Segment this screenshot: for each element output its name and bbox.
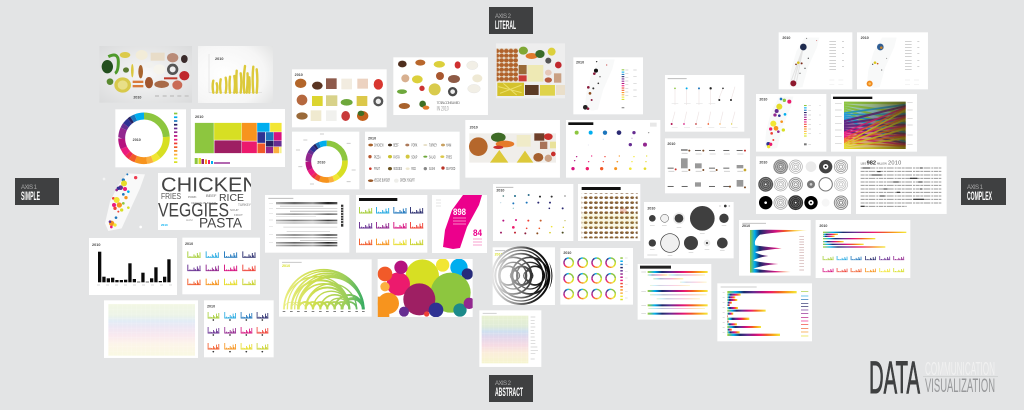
- panel: magenta map with stats: 898: [453, 207, 466, 217]
- panel: pastel grid with labels: [479, 310, 541, 367]
- panel: headline paragraph: LBS: [861, 161, 866, 165]
- panel: streaks with small multiples: [816, 220, 910, 278]
- axis label: literal: [489, 7, 533, 34]
- axis label: literal: LITERAL: [495, 18, 516, 32]
- panel: food icon list: [365, 132, 460, 189]
- axis label: abstract: AXIS 2: [495, 381, 512, 387]
- panel: word cloud: 2010: [161, 223, 168, 227]
- panel: food icon list: SOUP: [411, 154, 417, 159]
- panel: black bar chart: [89, 238, 177, 295]
- panel: small multiples with black header: [356, 195, 427, 253]
- panel: scattered food pictures: TOTAL CONSUMED: [437, 101, 460, 105]
- panel: scattered dot multiples: 2010: [496, 188, 504, 192]
- panel: food icon list: GREEK YOGURT: [400, 178, 415, 183]
- panel: magenta map with stats: [432, 195, 487, 253]
- panel: food icon list: HAM: [446, 143, 451, 148]
- panel: large food photo: 2010: [470, 125, 478, 129]
- panel: headline paragraph: 982: [867, 161, 876, 167]
- panel: fries bar chart: [198, 46, 273, 103]
- panel: linked map, blue and orange: 2010: [861, 36, 869, 40]
- panel: headline paragraph: [856, 156, 947, 214]
- panel: word cloud: BEEF: [206, 193, 217, 198]
- black bars: [98, 252, 171, 282]
- panel: food icon list: VEGGIES: [393, 166, 402, 171]
- panel: food collage treemap: [496, 43, 565, 98]
- panel: food icon list: TURKEY: [429, 143, 437, 148]
- panel: word cloud: PASTA: [199, 215, 243, 231]
- panel: word cloud: RICE: [219, 192, 244, 204]
- panel: small multiples with markers: [204, 300, 274, 357]
- panel: overlapping bubbles: [378, 258, 475, 317]
- panel: word cloud: CHICKEN: [161, 175, 258, 197]
- panel: large food photo: [465, 120, 560, 178]
- panel: small multiples grid: [182, 238, 260, 294]
- panel: small multiples grid: 2010: [185, 242, 193, 246]
- panel: food icon list: BEEF: [393, 143, 399, 148]
- panel: black overlapping rings: 2010: [495, 253, 503, 257]
- panel: dark proportional circles: 2010: [647, 206, 655, 210]
- panel: dot map on white strip: [103, 173, 145, 231]
- axis label: abstract: [489, 375, 533, 402]
- panel: word cloud: VEGGIE BURGER: [191, 201, 217, 205]
- panel: grey bars with food icons: 2010: [667, 142, 675, 146]
- panel: bubble map with legend: 2010: [759, 97, 767, 101]
- panel: word cloud: HAM: [186, 218, 193, 222]
- panel: word cloud: [158, 173, 258, 231]
- panel: map with legend: [573, 57, 643, 114]
- panel: black overlapping rings: [493, 247, 555, 305]
- panel: food icon list: PORK: [411, 143, 418, 148]
- axis label: literal: AXIS 2: [495, 14, 512, 20]
- panel: streamgraph spikes: [739, 220, 811, 276]
- axis label: simple: [15, 178, 59, 205]
- axis label: simple: AXIS 1: [21, 185, 38, 191]
- panel: dark proportional circles: [644, 202, 734, 258]
- panel: ingredient flat-lay photo: [99, 46, 192, 103]
- panel: word cloud: VEGGIES: [158, 201, 229, 222]
- panel: magenta map with stats: 84: [473, 228, 482, 238]
- panel: small donut multiples: [560, 248, 633, 305]
- panel: food photo grid: 2010: [295, 73, 303, 77]
- panel: word cloud: TURKEY: [238, 203, 252, 207]
- panel: arc diagram: [279, 259, 372, 317]
- axis label: complex: AXIS 1: [967, 185, 984, 191]
- panel: food icon list: 2010: [368, 136, 376, 140]
- panel: food photo grid: [292, 69, 387, 127]
- panel: main donut chart: [115, 109, 186, 167]
- panel: small multiples with markers: 2010: [207, 304, 215, 308]
- panel: bubble map with legend: [756, 94, 826, 152]
- panel: map with legend: 2010: [576, 61, 584, 65]
- panel: second donut with annotations: 2010: [317, 160, 325, 164]
- panel: scattered food pictures: [393, 57, 488, 115]
- panel: food icon list: RICE: [411, 166, 416, 171]
- panel: concentric ring multiples: 2010: [759, 161, 767, 165]
- panel: streaks with small multiples: 2010: [819, 224, 827, 228]
- panel: fries bar chart: 2010: [215, 57, 223, 61]
- axis label: abstract: ABSTRACT: [495, 385, 523, 399]
- panel: food icon list: CHICKEN: [374, 143, 383, 148]
- panel: arc diagram: 2010: [282, 264, 290, 268]
- panel: headline paragraph: 2010: [888, 161, 901, 167]
- axis label: simple: SIMPLE: [21, 189, 40, 203]
- panel: food icon list: FRIES: [446, 154, 452, 159]
- title wordmark: DATA: [869, 352, 920, 403]
- panel: ingredient flat-lay photo: 2010: [133, 96, 141, 100]
- axis label: complex: [961, 178, 1006, 205]
- panel: small dot charts: [665, 75, 744, 132]
- panel: pastel grid large: [104, 300, 198, 358]
- panel: grey heat bars: [265, 195, 349, 253]
- panel: pictogram grid: [578, 184, 640, 241]
- panel: linked map, navy and red: [779, 32, 852, 89]
- panel: coloured dot matrix: [566, 120, 660, 178]
- panel: scattered food pictures: IN 2010: [437, 106, 449, 113]
- panel: linked map, navy and red: 2010: [782, 36, 790, 40]
- panel: headline paragraph: MILLION: [877, 161, 887, 165]
- panel: alluvial flow diagram: [831, 94, 917, 152]
- illegible body copy rendered as lines: [861, 168, 942, 206]
- panel: food icon list: VEGGIE BURGER: [374, 178, 390, 183]
- panel: scattered dot multiples: [493, 184, 573, 241]
- panel: treemap: 2010: [195, 115, 203, 119]
- panel: food icon list: PASTA: [393, 154, 400, 159]
- panel: rainbow striped rows: [638, 264, 711, 320]
- panel: linked map, blue and orange: [857, 32, 928, 89]
- panel: word cloud: SOUP: [230, 208, 239, 212]
- panel: food icon list: SEAFOOD: [446, 166, 456, 171]
- panel: concentric ring multiples: [756, 156, 851, 214]
- panel: food icon list: SALAD: [429, 154, 436, 159]
- flow ribbons: [844, 102, 906, 149]
- panel: black bar chart: 2010: [92, 243, 100, 247]
- panel: small donut multiples: 2010: [563, 251, 571, 255]
- panel: grey bars with food icons: [665, 138, 750, 193]
- mini bars: [195, 158, 230, 164]
- fries bars: [213, 66, 257, 93]
- panel: food icon list: PIZZA: [374, 154, 381, 159]
- panel: food icon list: SUSHI: [429, 166, 435, 171]
- panel: food icon list: FRUIT: [374, 166, 380, 171]
- panel: word cloud: FRIES: [161, 192, 181, 201]
- panel: word cloud: PORK: [188, 195, 197, 199]
- panel: second donut with annotations: [292, 132, 359, 189]
- panel: word cloud: FRUIT: [234, 213, 243, 217]
- panel: main donut chart: 2010: [133, 138, 141, 142]
- treemap blocks: [195, 123, 282, 153]
- panel: rainbow horizontal bars: [717, 283, 812, 341]
- panel: streamgraph spikes: 2010: [742, 224, 750, 228]
- panel: treemap: [191, 109, 285, 167]
